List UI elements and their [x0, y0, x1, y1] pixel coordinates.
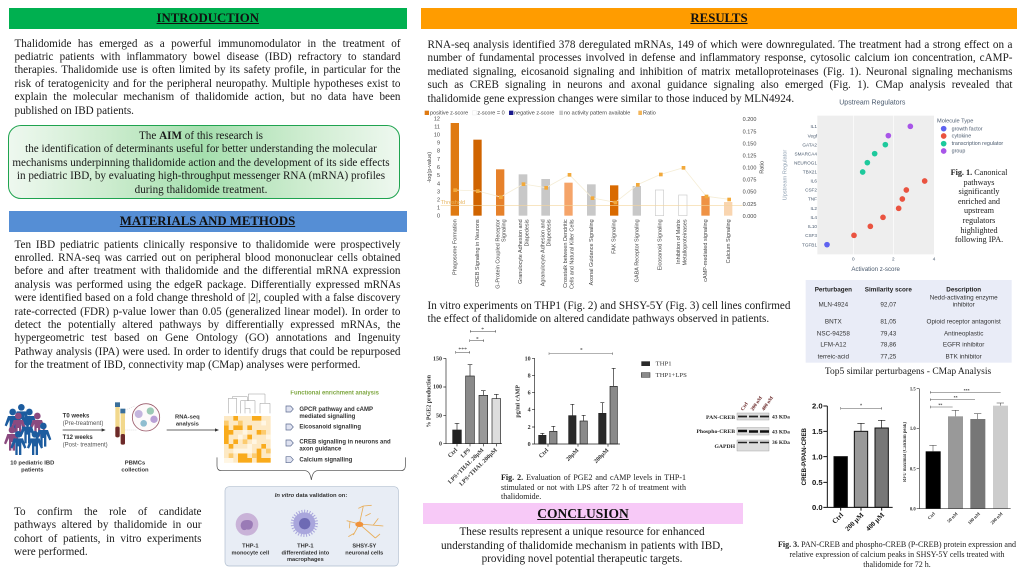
- table: top 5 perturbagens: EGFR inhibitor: [943, 342, 984, 349]
- chart: PGE2 production: *: [481, 327, 484, 333]
- chart: upstream regulators: IL4: [811, 215, 817, 220]
- heading: materials and methods: [8, 211, 406, 232]
- table: top 5 perturbagens: Perturbagen: [815, 287, 852, 294]
- axes: 2: [437, 197, 440, 203]
- text block: candidate pathways: pathways altered by thalidomide in our: [14, 519, 202, 531]
- table: top 5 perturbagens: 79,43: [880, 330, 897, 337]
- table: top 5 perturbagens: BTK inhibitor: [946, 353, 982, 360]
- panel: aim of the research: The AIM of this research is: [139, 130, 263, 142]
- chart: upstream regulators: Activation z-score: [851, 266, 901, 273]
- table: top 5 perturbagens: LFM-A12: [820, 342, 847, 349]
- table: top 5 perturbagens: inhibitor: [953, 302, 975, 309]
- icon: PBMCs magnifier: [132, 404, 160, 431]
- legend: THP1 conditions: THP1+LPS: [656, 372, 687, 379]
- chart: upstream regulators: TBX21: [803, 170, 817, 175]
- label: patients: 10 pediatric IBD: [10, 461, 54, 467]
- axes: 8: [437, 149, 440, 155]
- text block: results: thalidomide gene expression changes were similar to those induced by MLN4924.: [428, 93, 794, 105]
- pathway labels: Axonal Guidance Signaling: [589, 219, 595, 285]
- text block: results: number of fundamental processes involved in defense and inflammatory response, cytosolic calcium ion concentration, cAMP-: [428, 52, 1012, 64]
- chart: upstream regulators: Vegf: [808, 133, 818, 138]
- caption: figure 1: pathways: [964, 178, 994, 187]
- chart: PGE2 production: 150: [433, 356, 442, 362]
- text block: materials and methods: Ten IBD pediatric patients clinically responsive to thalidomide were prospectively: [14, 238, 400, 250]
- chart: PGE2 production: Ctrl: [447, 447, 459, 459]
- western blot: Phospho-CREB: [696, 429, 735, 435]
- pathway labels: Cells and Natural Killer Cells: [569, 219, 575, 289]
- caption: figure 3: thalidomide for 72 h.: [863, 560, 931, 569]
- text block: in vitro experiments: In vitro experiments on THP1 (Fig. 2) and SHSY-5Y (Fig. 3) cell lines confirmed: [428, 300, 790, 312]
- caption: figure 1: Fig. 1. Canonical: [951, 168, 1007, 177]
- chart: upstream regulators: 2: [892, 256, 895, 261]
- chart: calcium peaks: RFU maximal (Calcium peak): [903, 422, 908, 482]
- chart: calcium peaks: **: [938, 402, 942, 407]
- list: enriched pathways: Eicosanoid signalling: [299, 425, 361, 431]
- label: time points: (Post- treatment): [63, 442, 108, 448]
- panel: in vitro validation: In vitro data validation on:: [275, 493, 347, 499]
- chart: cAMP levels: pg/ml cAMP: [516, 385, 522, 418]
- caption: figure 3: Fig. 3. PAN-CREB and phospho-CREB (P-CREB) protein expression and: [778, 540, 1016, 549]
- list: enriched pathways: mediated signalling: [299, 414, 356, 420]
- chart: CREB-P / PAN-CREB: 1.5: [812, 427, 823, 436]
- text block: materials and methods: for the treatment of IBD, connectivity map (CMap) analyses were performed.: [14, 359, 360, 371]
- text block: introduction: published on IBD patients.: [14, 105, 134, 117]
- text block: introduction: pediatric patients with inflammatory bowel disease (IBD) refractory to standard: [14, 51, 400, 63]
- diagram: study workflow: [4, 390, 406, 566]
- text block: materials and methods: before and after treatment with thalidomide and the differential mRNA expression: [14, 265, 400, 277]
- text: 50 nM: [947, 511, 960, 524]
- chart: upstream regulators: CSF2: [805, 188, 817, 193]
- chart: canonical pathways: 0.025: [743, 202, 756, 208]
- chart: calcium peaks: 0.0: [910, 507, 916, 512]
- chart: calcium peaks: ***: [964, 388, 970, 393]
- list: enriched pathways: [286, 406, 391, 463]
- chart: cAMP levels: 20µM: [565, 448, 581, 463]
- table: top 5 perturbagens: Description: [946, 287, 981, 294]
- chart: PGE2 production: [426, 327, 502, 488]
- text block: candidate pathways: To confirm the role of candidate: [14, 506, 202, 518]
- panel: aim of the research: the identification of determinants useful for better understanding the molecular: [25, 143, 377, 155]
- text block: materials and methods: [14, 238, 400, 371]
- legend: no activity pattern available: [564, 111, 630, 117]
- caption: figure 1: regulators: [963, 216, 995, 225]
- text block: candidate pathways: [14, 506, 202, 558]
- table: top 5 perturbagens: Nedd-activating enzyme: [930, 295, 998, 302]
- axes: 5: [437, 173, 440, 179]
- pathway labels: Granulocyte Adhesion and: [518, 219, 524, 284]
- axes: 3: [437, 189, 440, 195]
- chart: cAMP levels: *: [580, 348, 583, 354]
- chart: upstream regulators: IL2: [811, 206, 817, 211]
- text block: results: mediated signaling, eicosanoid signaling and inhibition of matrix metalloproteinases (Fig. 1). Neuronal signaling mechanisms: [428, 66, 1012, 78]
- label: functional enrichment: Functional enrichment analysis: [290, 391, 380, 397]
- chart: upstream regulators: SMARCA4: [794, 151, 817, 156]
- list: enriched pathways: axon guidance: [299, 446, 342, 452]
- text block: candidate pathways: cohort of patients, in vitro experiments: [14, 533, 202, 545]
- chart: PGE2 production: *: [476, 336, 479, 342]
- pathway labels: [452, 219, 732, 289]
- axes: 0: [437, 214, 440, 220]
- pathway labels: GABA Receptor Signaling: [635, 219, 641, 282]
- legend: molecule type: group: [952, 149, 965, 155]
- chart: PGE2 production: LPS: [460, 447, 473, 460]
- list: enriched pathways: CREB signalling in neurons and: [299, 439, 391, 445]
- chart: heatmap: [224, 416, 271, 463]
- pathway labels: Diapedesis: [547, 219, 553, 247]
- text: Ctrl: [927, 511, 937, 521]
- ratio line: [455, 168, 729, 202]
- chart: upstream regulators: IL1: [811, 124, 817, 129]
- pathway labels: Phagosome Formation: [452, 219, 458, 275]
- table: top 5 perturbagens: 92,07: [880, 302, 897, 309]
- label: PBMCs: PBMCs: [125, 461, 145, 467]
- panel: in vitro validation: neuronal cells: [345, 550, 383, 556]
- chart: calcium peaks: 1.0: [910, 427, 916, 432]
- table: top 5 perturbagens: Similarity score: [865, 287, 912, 294]
- chart: upstream regulators: TGFB1: [802, 242, 817, 247]
- chart: canonical pathways: -log(p-value): [427, 152, 433, 183]
- table: top 5 perturbagens: 78,86: [880, 342, 897, 349]
- axes: 7: [437, 157, 440, 163]
- text block: materials and methods: hypergeometric test based on Gene Ontology (GO) annotations and Ingenuity: [14, 332, 400, 344]
- text block: conclusion: providing novel potential therapeutic targets.: [482, 553, 682, 565]
- chart: CREB-P / PAN-CREB: 2.0: [812, 402, 823, 411]
- chart: upstream regulators: TNF: [808, 197, 817, 202]
- table: top 5 perturbagens: [806, 280, 1012, 362]
- pathway labels: Diapedesis: [524, 219, 530, 247]
- panel: in vitro validation: [225, 487, 398, 566]
- text block: results: RNA-seq analysis identified 378 deregulated mRNAs, 149 of which were downregulated. The treatment had a strong effect on a: [428, 39, 1012, 51]
- text block: introduction: therapies. Thalidomide use is often limited by its safety profile, in particular for the: [14, 64, 400, 76]
- list: enriched pathways: Calcium signalling: [299, 457, 353, 463]
- pathway labels: FAK Signaling: [612, 219, 618, 254]
- chart: canonical pathways: [424, 110, 766, 289]
- chart: canonical pathways: 0.000: [743, 214, 756, 220]
- chart: PGE2 production: 50: [436, 413, 442, 419]
- axes: 1: [437, 206, 440, 212]
- text block: introduction: Thalidomide has emerged as a powerful immunomodulator in the treatment of: [14, 38, 400, 50]
- pathway labels: Agranulocyte Adhesion and: [540, 219, 546, 286]
- heading: introduction: INTRODUCTION: [157, 10, 259, 24]
- chart: PGE2 production: 0: [439, 442, 442, 448]
- chart: cAMP levels: Ctrl: [538, 448, 550, 460]
- western blot: 200 nM: [751, 396, 764, 412]
- table: top 5 perturbagens: Antineoplastic: [944, 330, 983, 337]
- chart: upstream regulators: 4: [933, 256, 936, 261]
- threshold: [441, 204, 743, 206]
- text block: materials and methods: analysis was performed using the edgeR package. Differentially expressed mRNAs: [14, 279, 400, 291]
- panel: aim of the research: mechanisms underpinning thalidomide action and the development of its side effects: [12, 157, 390, 169]
- chart: CREB-P / PAN-CREB: 0.0: [812, 503, 823, 512]
- table: top 5 perturbagens: 81,05: [880, 319, 897, 326]
- caption: figure 1: upstream: [964, 206, 994, 215]
- caption: figure 3: relative expression of calcium peaks in SHSY-5Y cells treated with: [790, 550, 1004, 559]
- chart: canonical pathways: 0.075: [743, 178, 756, 184]
- caption: figure 1: [950, 168, 1008, 244]
- arrow: to collection: [63, 428, 106, 432]
- panel: in vitro validation: monocyte cell: [231, 550, 270, 556]
- legend: molecule type: [937, 118, 1004, 155]
- pathway labels: Inhibition of Matrix: [676, 219, 682, 264]
- legend: negative z-score: [514, 111, 554, 117]
- table: top 5 perturbagens: NSC-94258: [817, 330, 850, 337]
- chart: upstream regulators: 0: [852, 256, 855, 261]
- chart: CREB-P / PAN-CREB: Ctrl: [831, 511, 845, 526]
- text block: materials and methods: detect the potentially altered pathways by differentially expressed mRNAs, the: [14, 319, 400, 331]
- chart: CREB-P / PAN-CREB: 0.5: [812, 478, 823, 487]
- label: RNA-seq: RNA-seq: [175, 414, 200, 420]
- axes: 12: [434, 116, 440, 122]
- icon: patient group: [4, 404, 51, 455]
- chart: upstream regulators: GATA2: [802, 142, 817, 147]
- western blot: [696, 396, 790, 452]
- text block: conclusion: [441, 526, 723, 565]
- label: time points: T12 weeks: [63, 435, 93, 441]
- chart: calcium peaks: [903, 387, 1011, 526]
- chart: PGE2 production: 100: [433, 385, 442, 391]
- pathway labels: Eicosanoid Signaling: [657, 219, 663, 270]
- chart: cAMP levels: 6: [528, 391, 531, 397]
- text block: candidate pathways: were performed.: [14, 546, 88, 558]
- table: top 5 perturbagens: BNTX: [825, 319, 843, 326]
- western blot: 43 KDa: [772, 430, 790, 436]
- legend: molecule type: transcription regulator: [952, 141, 1003, 147]
- axes: 4: [437, 181, 440, 187]
- chart: PGE2 production: LPS+THAL 20µM: [447, 447, 486, 485]
- chart: cAMP levels: [516, 348, 620, 465]
- chart: cAMP levels: 200µM: [593, 448, 611, 465]
- caption: figure 2: [501, 473, 686, 501]
- pathway labels: CREB Signaling in Neurons: [475, 219, 481, 287]
- chart: CREB-P / PAN-CREB: 200 µM: [844, 511, 866, 533]
- text block: results: [428, 39, 1012, 105]
- chart: canonical pathways: 0.125: [743, 153, 756, 159]
- text block: materials and methods: enrolled. RNA-seq was carried out on peripheral blood mononuclear cells obtained: [14, 252, 400, 264]
- label: time points: [63, 414, 108, 448]
- caption: figure 2: stimulated or not with LPS after 72 h of treatment with: [501, 483, 686, 492]
- chart: canonical pathways: 0.100: [743, 166, 756, 172]
- list: enriched pathways: GPCR pathway and cAMP: [299, 407, 373, 413]
- chart: cAMP levels: 2: [528, 425, 531, 431]
- chart: canonical pathways: 0.150: [743, 141, 756, 147]
- legend: THP1 conditions: [641, 361, 687, 379]
- text block: results: such as CREB signaling in neurons and axonal guidance signaling also emerged (Fig. 1). CMap analysis revealed that: [428, 79, 1012, 91]
- icon: macrophage: [292, 511, 316, 535]
- table: top 5 perturbagens: terreic-acid: [818, 353, 849, 360]
- text block: introduction: [14, 38, 400, 117]
- chart: upstream regulators: [782, 99, 936, 273]
- text block: materials and methods: were identified based on a fold change threshold of |2|, coupled with a false discovery: [14, 292, 400, 304]
- chart: cAMP levels: 4: [528, 408, 531, 414]
- axes: 11: [434, 124, 440, 130]
- panel: in vitro validation: THP-1: [297, 544, 314, 550]
- chart: canonical pathways: Ratio: [760, 161, 766, 174]
- label: time points: (Pre-treatment): [63, 421, 103, 427]
- heading: results: RESULTS: [690, 11, 748, 25]
- western blot: PAN-CREB: [706, 415, 735, 421]
- chart: upstream regulators: Upstream Regulators: [839, 99, 906, 106]
- panel: aim of the research: [8, 125, 400, 199]
- pathway labels: G-Protein Coupled Receptor: [495, 219, 501, 289]
- pathway labels: Metalloproteinases: [682, 219, 688, 266]
- pathway labels: Crosstalk between Dendritic: [563, 219, 569, 288]
- heading: conclusion: CONCLUSION: [537, 506, 629, 521]
- label: PBMCs: collection: [121, 468, 149, 474]
- text block: introduction: risk of teratogenicity and for the peripheral neuropathy. Multiple hypotheses exist to: [14, 78, 400, 90]
- table: top 5 perturbagens: Opioid receptor antagonist: [927, 319, 1001, 326]
- chart: CREB-P / PAN-CREB: 1.0: [812, 452, 823, 461]
- text: 200 nM: [990, 511, 1005, 526]
- table: top 5 perturbagens: 77,25: [880, 353, 897, 360]
- chart: upstream regulators: IL10: [808, 224, 817, 229]
- pathway labels: Calcium Signaling: [726, 219, 732, 263]
- chart: CREB-P / PAN-CREB: [801, 402, 893, 533]
- panel: in vitro validation: SHSY-5Y: [352, 544, 376, 550]
- label: patients: patients: [21, 468, 44, 474]
- western blot: 400 nM: [762, 396, 775, 412]
- chart: CREB-P / PAN-CREB: CREB-P/PAN-CREB: [801, 427, 808, 485]
- text block: materials and methods: Pathway analysis (IPA) were used. In order to identify drugs that could be repurposed: [14, 346, 400, 358]
- legend: molecule type: Molecule Type: [937, 119, 973, 125]
- label: time points: T0 weeks: [63, 414, 90, 420]
- western blot: 43 KDa: [772, 414, 790, 420]
- arrow: bracket to validation: [217, 457, 405, 480]
- chart: calcium peaks: 1.5: [910, 387, 916, 392]
- chart: canonical pathways: 0.050: [743, 190, 756, 196]
- pathway labels: Signaling: [502, 219, 508, 242]
- heading: introduction: [8, 8, 407, 28]
- western blot: 36 KDa: [772, 440, 790, 446]
- chart: PGE2 production: ***: [458, 347, 467, 353]
- chart: cAMP levels: 8: [528, 373, 531, 379]
- heading: conclusion: [423, 503, 743, 524]
- text block: introduction: explain the molecular mechanism of thalidomide action, but no data have been: [14, 91, 400, 103]
- axes: 10: [434, 132, 440, 138]
- chart: canonical pathways: 0.200: [743, 117, 756, 123]
- chart: calcium peaks: **: [954, 395, 958, 400]
- icon: neuron: [347, 505, 383, 538]
- legend: positive z-score: [430, 111, 468, 117]
- chart: cAMP levels: 10: [525, 356, 531, 362]
- icon: monocyte: [236, 513, 258, 536]
- panel: in vitro validation: macrophages: [287, 557, 324, 563]
- legend: Ratio: [643, 111, 656, 117]
- legend: molecule type: cytokine: [952, 134, 971, 140]
- legend: z-score = 0: [477, 111, 505, 117]
- legend: [425, 111, 656, 117]
- chart: upstream regulators: Upstream Regulator: [783, 150, 789, 200]
- panel: aim of the research: during thalidomide treatment.: [135, 184, 267, 196]
- chart: canonical pathways: 0.175: [743, 129, 756, 135]
- caption: figure 1: enriched and: [958, 197, 1000, 206]
- chart: upstream regulators: NEUROG1: [794, 160, 817, 165]
- panel: in vitro validation: THP-1: [242, 544, 259, 550]
- caption: figure 1: highlighted: [960, 226, 998, 235]
- label: RNA-seq: analysis: [176, 421, 199, 427]
- text: 100 nM: [968, 511, 982, 526]
- caption: figure 1: following IPA.: [955, 235, 1003, 244]
- chart: CREB-P / PAN-CREB: *: [860, 403, 862, 409]
- axes: 9: [437, 141, 440, 147]
- chart: cAMP levels: 0: [528, 442, 531, 448]
- bars: [451, 123, 732, 216]
- text block: conclusion: These results represent a unique resource for enhanced: [459, 526, 705, 538]
- caption: figure 2: Fig. 2. Evaluation of PGE2 and cAMP levels in THP-1: [501, 473, 686, 482]
- text block: in vitro experiments: [428, 300, 790, 325]
- legend: molecule type: growth factor: [952, 126, 983, 132]
- table: top 5 perturbagens: MLN-4924: [819, 302, 849, 309]
- icon: dendrogram: [228, 394, 270, 413]
- legend: THP1 conditions: THP1: [656, 361, 672, 368]
- heading: results: [421, 8, 1017, 29]
- chart: CREB-P / PAN-CREB: 400 µM: [864, 511, 886, 533]
- chart: upstream regulators: IL6: [811, 179, 817, 184]
- text block: conclusion: understanding of thalidomide mechanism in patients with IBD,: [441, 540, 723, 552]
- chart: PGE2 production: % PGE2 production: [426, 374, 432, 428]
- chart: canonical pathways: Threshold: [441, 200, 465, 206]
- caption: figure 3: [778, 540, 1016, 569]
- western blot: GAPDH: [714, 444, 736, 450]
- caption: figure 2: thalidomide.: [501, 492, 541, 501]
- chart: PGE2 production: LPS+THAL 200µM: [459, 447, 499, 488]
- axes: 6: [437, 165, 440, 171]
- arrow: to heatmap: [167, 428, 219, 432]
- panel: in vitro validation: differentiated into: [281, 550, 330, 556]
- panel: aim of the research: in pediatric IBD, by evaluating high-throughput messenger RNA (mRNA) profiles: [17, 170, 385, 182]
- chart: calcium peaks: 0.5: [910, 467, 916, 472]
- text block: materials and methods: rate-corrected (FDR) p-value lower than 0.05 (generalized linear model). In order to: [14, 306, 400, 318]
- text block: in vitro experiments: the effect of thalidomide on altered candidate pathways observed in patients.: [428, 313, 769, 325]
- western blot: Ctrl: [741, 402, 750, 412]
- caption: figure 1: significantly: [959, 187, 999, 196]
- icon: blood tubes: [115, 402, 137, 445]
- chart: upstream regulators: CSF3: [805, 233, 817, 238]
- axes: [434, 116, 440, 220]
- caption: table: Top5 similar perturbagens - CMap Analysis: [825, 367, 991, 377]
- heading: materials and methods: MATERIALS AND METHODS: [120, 214, 295, 228]
- pathway labels: cAMP-mediated signaling: [703, 219, 709, 282]
